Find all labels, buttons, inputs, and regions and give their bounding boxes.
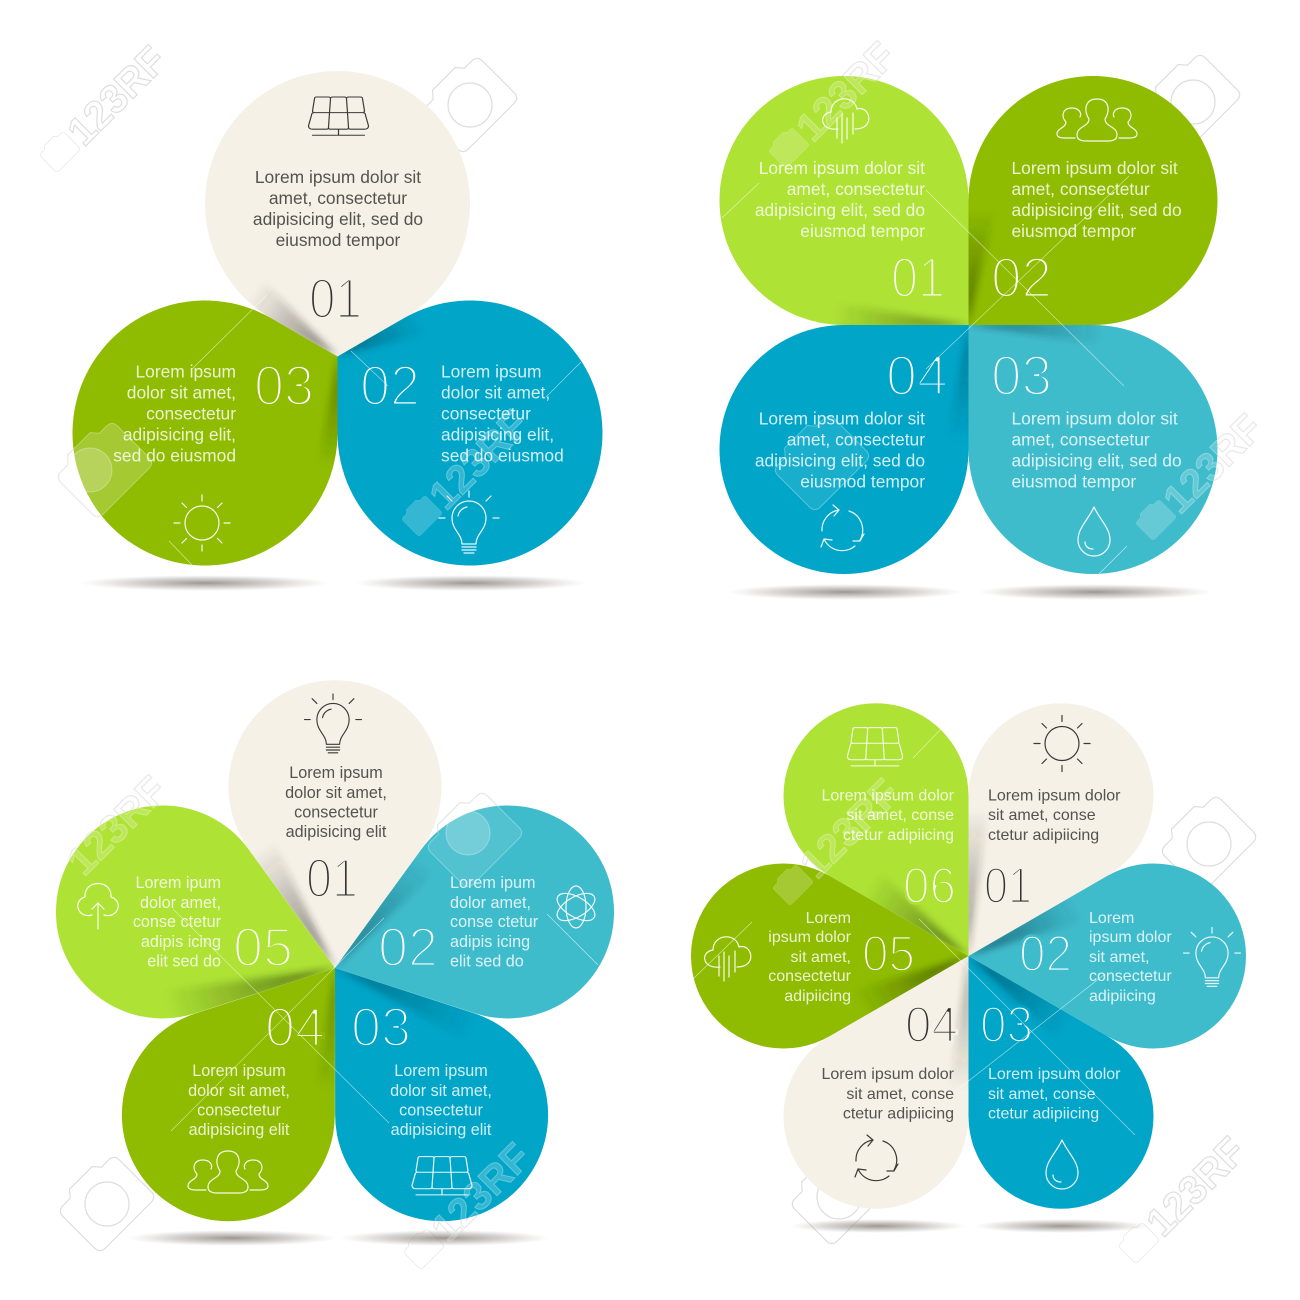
- number 04: 04: [265, 996, 325, 1058]
- icon: recycle arrows: [821, 505, 864, 551]
- number 02: 02: [991, 246, 1052, 310]
- icon: tree: [78, 884, 118, 929]
- text block 06: [822, 788, 955, 844]
- text block 05: conse ctetur: [133, 913, 222, 931]
- watermark: grey stamps on background: 123RF: [59, 768, 175, 884]
- text block 02: [450, 874, 539, 970]
- text block 05: ipsum dolor: [768, 929, 852, 946]
- text block 04: Lorem ipsum dolor sit: [759, 408, 925, 428]
- text block 02: consectetur: [1089, 968, 1172, 985]
- petal 06 light green: [784, 703, 968, 956]
- watermark: grey stamps on background: 123RF: [1138, 1129, 1254, 1245]
- text block 04: [822, 1066, 955, 1122]
- watermark: translucent stamps over petals: 123RF: [788, 34, 904, 150]
- icon: water drop: [1078, 507, 1110, 556]
- text block 05: [768, 910, 852, 1005]
- text block 04: adipisicing elit: [189, 1121, 290, 1139]
- text block 02: consectetur: [441, 404, 531, 424]
- text block 06: sit amet, conse: [846, 807, 954, 824]
- text block 03: adipisicing elit: [391, 1121, 492, 1139]
- text block 03: [988, 1066, 1121, 1122]
- text block 01: adipisicing elit, sed do: [755, 200, 925, 220]
- text block 02: elit sed do: [450, 952, 524, 970]
- number 03: 03: [254, 354, 314, 418]
- text block 01: consectetur: [294, 804, 378, 822]
- petal 04 blue: [720, 325, 968, 574]
- text block 03: adipisicing elit,: [123, 424, 236, 444]
- text block 01: [755, 158, 925, 241]
- text block 02: eiusmod tempor: [1012, 221, 1136, 241]
- text block 01: Lorem ipsum dolor sit: [255, 167, 421, 187]
- text block 04: Lorem ipsum dolor: [822, 1066, 955, 1083]
- text block 05: dolor amet,: [140, 894, 221, 912]
- text block 02: sed do eiusmod: [441, 446, 564, 466]
- number 04: 04: [905, 996, 958, 1053]
- text block 01: adipisicing elit, sed do: [253, 209, 423, 229]
- text block 04: [755, 408, 925, 492]
- petal 03 blue: [335, 968, 548, 1222]
- text block 05: sit amet,: [791, 949, 851, 966]
- text block 05: adipis icing: [141, 933, 221, 951]
- text block 06: Lorem ipsum dolor: [822, 788, 955, 804]
- text block 04: dolor sit amet,: [188, 1082, 290, 1100]
- text block 03: sed do eiusmod: [113, 446, 236, 466]
- petal 02 green: [968, 76, 1218, 325]
- text block 03: [390, 1062, 492, 1139]
- text block 02: sit amet,: [1089, 949, 1149, 966]
- text block 01: eiusmod tempor: [800, 221, 925, 241]
- watermark: grey stamps on background: 123RF: [1155, 406, 1271, 522]
- text block 03: eiusmod tempor: [1012, 472, 1136, 492]
- text block 02: adipiicing: [1089, 988, 1156, 1005]
- text block 01: [988, 788, 1121, 844]
- petal 04 cream: [784, 956, 968, 1209]
- number 05: 05: [862, 925, 915, 982]
- number 01: 01: [309, 267, 362, 331]
- icon: people: [1057, 99, 1137, 141]
- text block 01: dolor sit amet,: [285, 784, 387, 802]
- text block 02: adipis icing: [450, 933, 530, 951]
- watermark: translucent stamps over petals: 123RF: [792, 771, 908, 887]
- petal 05 green: [691, 864, 968, 1048]
- text block 04: eiusmod tempor: [800, 472, 925, 492]
- text block 01: amet, consectetur: [269, 188, 407, 208]
- text block 02: Lorem ipsum dolor sit: [1012, 158, 1178, 178]
- text block 02: [1089, 910, 1172, 1005]
- icon: light bulb: [304, 694, 362, 753]
- text block 02: [441, 362, 564, 466]
- icon: solar panel: [847, 728, 903, 766]
- number 06: 06: [903, 857, 956, 914]
- panel: six petal diagram: [691, 703, 1246, 1209]
- number 01: 01: [306, 847, 358, 909]
- number 02: 02: [378, 916, 438, 978]
- number 02: 02: [1019, 925, 1072, 982]
- text block 01: Lorem ipsum dolor: [988, 788, 1121, 804]
- text block 01: ctetur adipiicing: [988, 827, 1099, 844]
- panel: three petal diagram: [72, 71, 602, 566]
- text block 03: Lorem ipsum dolor sit: [1012, 408, 1178, 428]
- text block 05: consectetur: [768, 968, 852, 985]
- icon: atom: [553, 886, 599, 928]
- text block 01: Lorem ipsum dolor sit: [759, 158, 925, 178]
- text block 04: [188, 1062, 290, 1139]
- text block 03: ctetur adipiicing: [988, 1106, 1099, 1122]
- text block 05: [133, 874, 222, 970]
- text block 03: dolor sit amet,: [127, 382, 236, 402]
- text block 04: ctetur adipiicing: [843, 1106, 954, 1122]
- text block 02: adipisicing elit,: [441, 424, 554, 444]
- text block 03: consectetur: [399, 1102, 483, 1120]
- icon: solar panel: [412, 1157, 472, 1195]
- petal 01 cream: [205, 71, 470, 356]
- text block 02: dolor amet,: [450, 894, 531, 912]
- number 02: 02: [360, 354, 420, 418]
- petal 03 green: [72, 300, 338, 566]
- text block 03: consectetur: [146, 404, 236, 424]
- petal 01 light green: [720, 76, 968, 325]
- text block 01: [253, 167, 423, 250]
- text block 02: Lorem ipum: [450, 874, 535, 892]
- text block 05: Lorem: [806, 910, 851, 927]
- text block 01: eiusmod tempor: [276, 230, 401, 250]
- text block 03: [1012, 408, 1182, 492]
- icon: solar panel: [308, 97, 368, 135]
- text block 01: sit amet, conse: [988, 807, 1096, 824]
- icon: rain cloud: [823, 99, 869, 143]
- icon: light bulb: [1184, 927, 1240, 986]
- text block 04: consectetur: [197, 1102, 281, 1120]
- number 03: 03: [991, 344, 1052, 408]
- text block 04: Lorem ipsum: [192, 1062, 286, 1080]
- petal 01 cream: [228, 680, 442, 968]
- watermark: grey stamps on background: 123RF: [421, 402, 537, 518]
- number 05: 05: [233, 916, 293, 978]
- petal 02 blue: [338, 300, 602, 566]
- text block 03: dolor sit amet,: [390, 1082, 492, 1100]
- watermark: translucent stamps over petals: 123RF: [421, 402, 537, 518]
- text block 02: amet, consectetur: [1012, 179, 1150, 199]
- text block 03: Lorem ipsum dolor: [988, 1066, 1121, 1083]
- petal 03 teal: [968, 325, 1218, 574]
- petal 02 teal: [968, 864, 1246, 1048]
- watermark: grey stamps on background: 123RF: [792, 771, 908, 887]
- text block 03: Lorem ipsum: [135, 362, 236, 382]
- text block 02: Lorem ipsum: [441, 362, 542, 382]
- icon: water drop: [1046, 1140, 1078, 1189]
- text block 03: Lorem ipsum: [394, 1062, 488, 1080]
- petal 05 light green: [56, 806, 335, 1018]
- number 01: 01: [984, 857, 1032, 914]
- ground shadows under the four diagrams: [80, 575, 1213, 1246]
- petal 04 green: [122, 968, 335, 1222]
- panel: four petal diagram: [720, 76, 1218, 574]
- watermark: translucent stamps over petals: 123RF: [59, 768, 175, 884]
- petal 01 cream: [968, 703, 1154, 956]
- icon: recycle arrows: [855, 1135, 898, 1181]
- text block 05: Lorem ipum: [136, 874, 221, 892]
- text block 04: sit amet, conse: [846, 1086, 954, 1103]
- number 03: 03: [980, 996, 1033, 1053]
- icon: rain cloud: [705, 937, 751, 981]
- watermark: grey stamps on background: 123RF: [423, 1135, 539, 1251]
- icon: people: [188, 1151, 268, 1193]
- text block 04: amet, consectetur: [787, 430, 925, 450]
- number 01: 01: [891, 246, 945, 310]
- icon: sun: [174, 495, 230, 551]
- text block 04: adipisicing elit, sed do: [755, 450, 925, 470]
- text block 01: [285, 764, 387, 841]
- watermark: grey stamps on background: 123RF: [59, 38, 175, 154]
- icon: sun: [1034, 716, 1090, 772]
- watermark: translucent stamps over petals: 123RF: [1155, 406, 1271, 522]
- text block 01: adipisicing elit: [286, 823, 387, 841]
- number 04: 04: [886, 344, 948, 408]
- text block 02: conse ctetur: [450, 913, 539, 931]
- text block 06: ctetur adipiicing: [843, 827, 954, 844]
- text block 05: adipiicing: [784, 988, 851, 1005]
- text block 03: sit amet, conse: [988, 1086, 1096, 1103]
- text block 02: dolor sit amet,: [441, 382, 550, 402]
- text block 03: [113, 362, 236, 466]
- text block 02: Lorem: [1089, 910, 1134, 927]
- watermark: grey stamps on background: 123RF: [788, 34, 904, 150]
- text block 03: adipisicing elit, sed do: [1012, 450, 1182, 470]
- text block 02: ipsum dolor: [1089, 929, 1172, 946]
- text block 02: [1012, 158, 1182, 241]
- text block 01: Lorem ipsum: [289, 764, 383, 782]
- text block 05: elit sed do: [147, 952, 221, 970]
- panel: five petal diagram: [56, 680, 614, 1222]
- number 03: 03: [351, 996, 411, 1058]
- petal 02 teal: [335, 806, 614, 1018]
- watermark: translucent stamps over petals: 123RF: [423, 1135, 539, 1251]
- petal 03 blue: [968, 956, 1154, 1209]
- text block 01: amet, consectetur: [787, 179, 925, 199]
- text block 02: adipisicing elit, sed do: [1012, 200, 1182, 220]
- icon: light bulb: [439, 491, 499, 553]
- text block 03: amet, consectetur: [1012, 430, 1150, 450]
